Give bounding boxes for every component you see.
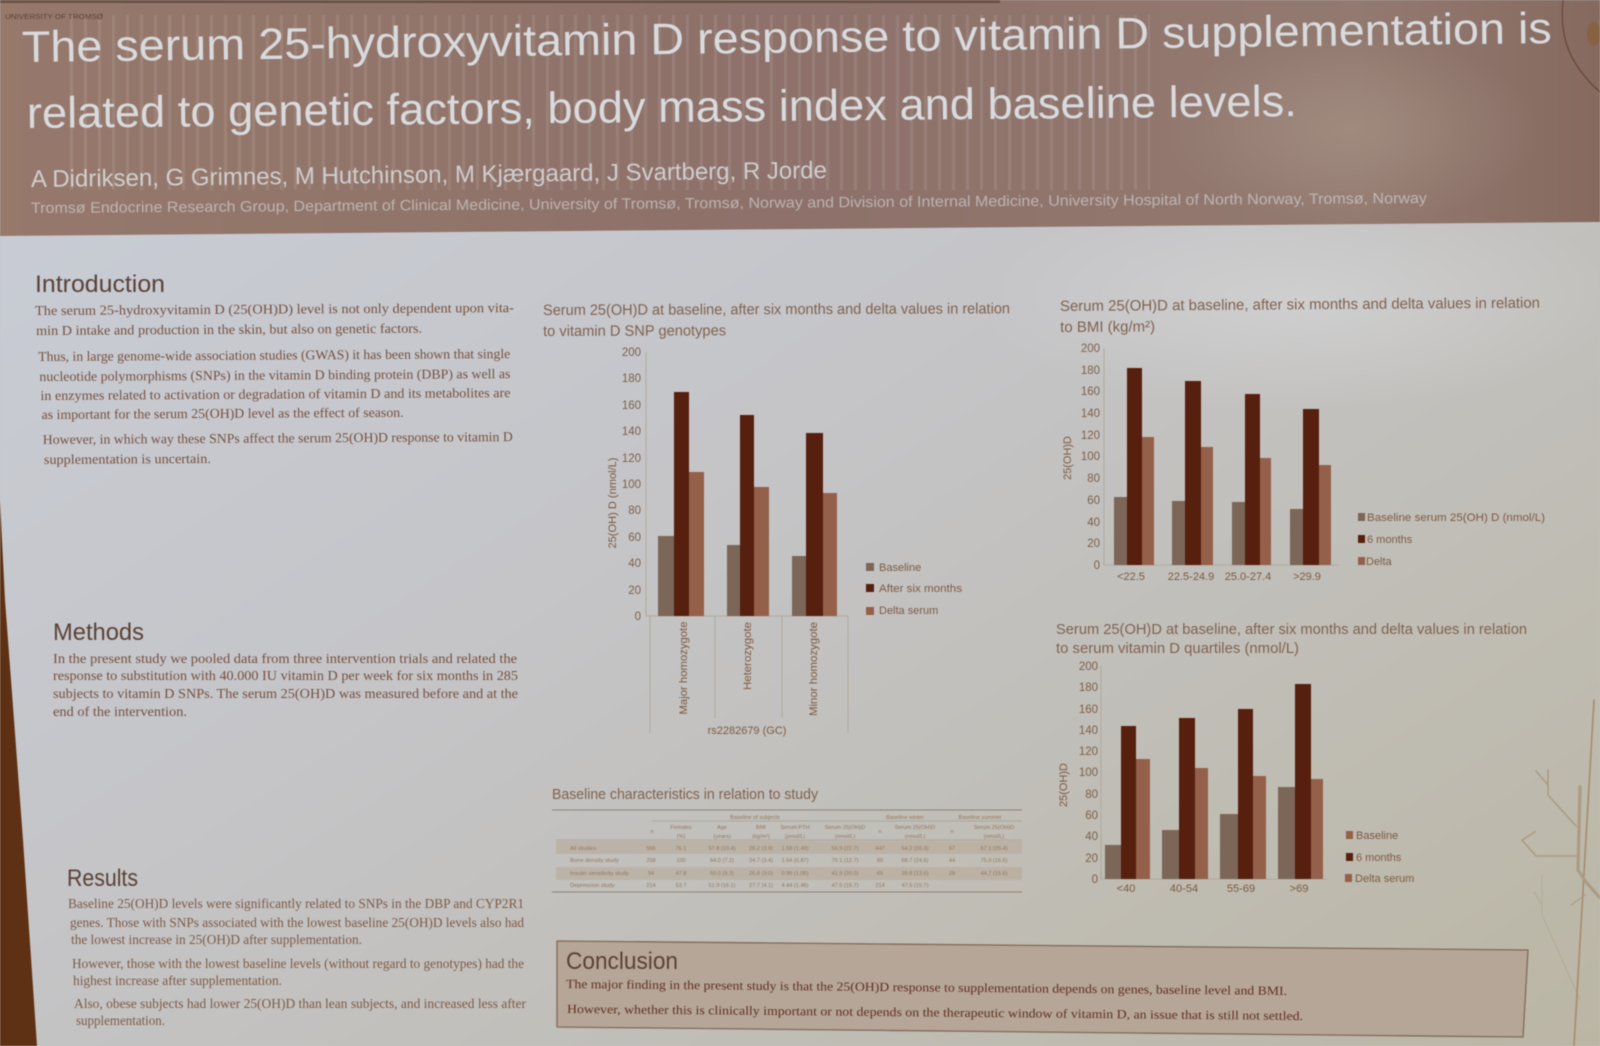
text block: introduction: However, in which way these SNPs affect the serum 25(OH)D response to vitamin D [43,429,513,447]
table header: (nmol/L) [835,834,855,840]
y axis labels: 40 [1087,517,1100,529]
chart title: genotypes: Serum 25(OH)D at baseline, after six months and delta values in relation [543,300,1010,319]
legend: 6 months [1367,534,1413,546]
heading: methods: Methods [53,619,144,646]
title: related to genetic factors, body mass index and baseline levels. [27,77,1297,138]
table rows: 39.8 (13.6) [901,871,929,877]
table rows: 214 [646,883,656,889]
category labels: >29.9 [1293,571,1321,583]
y axis labels: 0 [1094,560,1100,572]
table header: Females [670,825,692,831]
table rows: 68.7 (24.6) [901,858,929,864]
table header: n [878,829,882,835]
text block: introduction: Thus, in large genome-wide association studies (GWAS) it has been shown that single [38,346,510,364]
y axis labels: 180 [1079,682,1098,694]
table header [650,815,1014,840]
table rows: 1.58 (1.49) [781,846,809,852]
y axis labels [622,347,641,623]
table rows: 214 [875,883,885,889]
table rows: 53.7 [676,883,686,889]
y axis labels: 160 [1079,704,1098,716]
table header: (years) [713,834,731,840]
axes [1104,348,1339,565]
text block: results: Also, obese subjects had lower 25(OH)D than lean subjects, and increased less after [74,996,527,1011]
y axis labels: 140 [1081,408,1100,420]
table header: Age [717,825,727,831]
table header: (kg/m²) [752,834,770,840]
panel: BMI chart [1060,295,1545,583]
table rows: 44 [949,858,955,864]
table header: Baseline summer [958,815,1002,821]
panel: genotype chart [543,300,1010,737]
y axis labels: 200 [1079,661,1098,673]
conclusion box [557,941,1528,1037]
table rows: 0.96 (1.06) [781,871,809,877]
y axis labels: 80 [1087,473,1100,485]
table rows: 50.0 (9.3) [710,871,734,877]
text block: conclusion: However, whether this is clinically important or not depends on the therapeutic window of vitamin D, an issue that is still not settled. [567,1002,1303,1023]
y axis labels: 60 [1085,810,1098,822]
table header: (pmol/L) [785,834,805,840]
bars [1105,684,1323,879]
table header: (%) [677,834,685,840]
text block: methods: subjects to vitamin D SNPs. The serum 25(OH)D was measured before and at the [53,686,518,701]
table rows: 566 [646,846,656,852]
y axis labels: 180 [622,373,641,385]
y axis labels: 100 [622,479,641,491]
category labels: Heterozygote [742,622,754,690]
title: The serum 25-hydroxyvitamin D response to vitamin D supplementation is [22,4,1552,72]
text block: methods: end of the intervention. [53,704,187,719]
table rows: 100 [676,858,686,864]
text block: introduction: nucleotide polymorphisms (SNPs) in the vitamin D binding protein (DBP) as well as [39,366,510,384]
header band [0,0,1600,236]
text block: introduction [35,300,515,467]
twig shadow on right side [1522,700,1600,1046]
legend: Delta [1366,556,1393,568]
y axis labels: 200 [1081,343,1100,355]
table rows: 47.5 (15.7) [901,883,929,889]
table rows: 67.1 (25.4) [980,846,1008,852]
axes and separators [646,352,848,733]
table header: Serum 25(OH)D [825,825,865,831]
heading: conclusion: Conclusion [566,948,678,975]
y axis title: 25(OH) D (nmol/L) [607,457,619,549]
text block: methods: response to substitution with 40.000 IU vitamin D per week for six months in 285 [53,668,518,683]
table rows: Bone density study [570,858,619,864]
y axis labels: 0 [1092,874,1098,886]
y axis labels: 120 [622,453,641,465]
table rows: 1.64 (0.87) [781,858,809,864]
table rows: 447 [875,846,885,852]
authors: A Didriksen, G Grimnes, M Hutchinson, M Kjærgaard, J Svartberg, R Jorde [31,157,827,193]
affiliation: Tromsø Endocrine Research Group, Department of Clinical Medicine, University of Tromsø, Tromsø, Norway and Division of Internal Medicine, University Hospital of North Norway, Tromsø, Norway [31,190,1428,217]
table rows: 76.1 [676,846,686,852]
y axis labels: 60 [628,532,641,544]
chart title: genotypes [543,300,1010,340]
table rows: 28 [949,871,955,877]
legend [1345,830,1414,885]
table rows: 51.9 (16.1) [708,883,736,889]
y axis labels: 40 [1085,831,1098,843]
y axis title: 25(OH)D [1058,763,1070,807]
x axis label: rs2282679 (GC) [708,725,786,737]
table rows: 27.7 (4.1) [749,883,773,889]
text block: results: the lowest increase in 25(OH)D after supplementation. [71,932,362,947]
table rows: 64.0 (7.2) [710,858,734,864]
y axis labels: 20 [1085,853,1098,865]
axes [1101,666,1327,879]
y axis labels: 160 [622,400,641,412]
y axis labels: 40 [628,558,641,570]
heading: introduction: Introduction [35,271,165,298]
text block: results: Baseline 25(OH)D levels were significantly related to SNPs in the DBP and CYP2R1 [68,896,524,911]
table rows: 57 [949,846,955,852]
legend: Baseline [879,562,921,574]
y axis labels: 60 [1087,495,1100,507]
text block: methods: In the present study we pooled data from three intervention trials and related the [53,651,517,666]
category labels: <40 [1117,883,1135,895]
table rows: 94 [648,871,654,877]
legend: Baseline [1356,830,1398,842]
text block: introduction: The serum 25-hydroxyvitamin D (25(OH)D) level is not only dependent upon vita- [35,300,515,318]
table rows: 47.5 (15.7) [831,883,859,889]
table header: n [650,829,654,835]
table rows: Insulin sensitivity study [570,871,629,877]
table rows: 4.44 (1.46) [781,883,809,889]
table rows: 57.8 (10.4) [708,846,736,852]
table rows: 54.2 (20.3) [901,846,929,852]
table rows: 47.8 [676,871,686,877]
table header: Baseline winter [886,815,924,821]
legend [866,562,963,617]
chart title: BMI: Serum 25(OH)D at baseline, after six months and delta values in relation [1060,295,1540,315]
y axis labels [1079,661,1098,886]
category labels: 25.0-27.4 [1225,571,1271,583]
text block: conclusion: The major finding in the present study is that the 25(OH)D response to supplementation depends on genes, baseline level and BMI. [566,977,1287,998]
y axis labels: 120 [1081,430,1100,442]
legend: Delta serum [1355,873,1414,885]
category labels: Major homozygote [678,621,690,715]
y axis labels: 180 [1081,365,1100,377]
category labels [678,622,820,716]
table rows: 75.1 (12.7) [831,858,859,864]
category labels [1117,883,1308,895]
panel: methods [53,619,518,719]
y axis labels: 20 [1087,538,1100,550]
table heading: Baseline characteristics in relation to study [552,787,819,803]
table rows: All studies [570,846,597,852]
y axis labels: 140 [1079,725,1098,737]
table header: BMI [756,825,766,831]
table header: Serum 25(OH)D [895,825,935,831]
table header: n [950,829,954,835]
legend: Baseline serum 25(OH) D (nmol/L) [1367,512,1545,524]
text block: methods [53,651,518,719]
chart title: genotypes: to vitamin D SNP genotypes [543,322,726,340]
legend: 6 months [1356,852,1402,864]
brown edge strip at left [0,500,37,1046]
chart title: quartiles [1056,621,1527,657]
title [22,4,1552,138]
table rows: 56.9 (22.7) [831,846,859,852]
text block: introduction: supplementation is uncertain. [44,451,211,467]
category labels: 40-54 [1170,883,1198,895]
y axis labels: 20 [628,585,641,597]
y axis labels: 80 [1085,789,1098,801]
y axis labels: 200 [622,347,641,359]
category labels: 55-69 [1227,883,1255,895]
table rows [570,846,1008,889]
panel: quartile chart [1056,621,1527,895]
category labels: <22.5 [1117,571,1145,583]
text block: results: However, those with the lowest baseline levels (without regard to genotypes) had the [72,956,524,971]
y axis labels: 100 [1079,767,1098,779]
y axis labels: 100 [1081,451,1100,463]
y axis labels: 0 [635,611,641,623]
panel: results [67,865,527,1028]
table rows: Depression study [570,883,615,889]
table rows: 258 [646,858,656,864]
text block: introduction: in enzymes related to activation or degradation of vitamin D and its metabolites are [40,385,511,403]
chart title: BMI [1060,295,1540,336]
bars [658,392,837,616]
y axis labels: 120 [1079,746,1098,758]
bars [1114,368,1331,565]
y axis labels: 160 [1081,386,1100,398]
table header: (nmol/L) [905,834,925,840]
text block: introduction: min D intake and production in the skin, but also on genetic factors. [36,321,422,338]
y axis labels: 80 [628,505,641,517]
table header: (nmol/L) [984,834,1004,840]
y axis labels [1081,343,1100,572]
table rules and bands [552,810,1022,892]
category labels: 22.5-24.9 [1168,571,1214,583]
text block: results: genes. Those with SNPs associated with the lowest baseline 25(OH)D levels also had [70,915,524,930]
panel: introduction [35,271,515,467]
panel: baseline table [552,787,1022,892]
text block: results [68,896,527,1028]
text block: conclusion [566,977,1303,1023]
category labels [1117,571,1321,583]
legend: Delta serum [879,605,938,617]
text block: results: highest increase after supplementation. [73,973,282,988]
chart title: quartiles: to serum vitamin D quartiles (nmol/L) [1056,640,1299,657]
table header: Baseline of subjects [730,815,780,821]
table rows: 44.7 (15.6) [980,871,1008,877]
panel: conclusion [557,941,1528,1037]
text block: results: supplementation. [76,1013,165,1028]
y axis title: 25(OH)D [1062,436,1074,480]
table rows: 28.2 (3.9) [749,846,773,852]
table rows: 41.9 (20.0) [831,871,859,877]
legend [1358,512,1545,568]
legend: After six months [879,583,963,595]
table rows: 65 [877,871,883,877]
table rows: 26.8 (3.0) [749,871,773,877]
chart title: BMI: to BMI (kg/m²) [1060,318,1155,336]
table header: Serum PTH [780,825,810,831]
institution mark: UNIVERSITY OF TROMSØ [5,14,104,21]
table rows: 34.7 (3.4) [749,858,773,864]
y axis labels: 140 [622,426,641,438]
table rows: 75.9 (16.6) [980,858,1008,864]
table header: Serum 25(OH)D [974,825,1014,831]
table rows: 80 [877,858,883,864]
category labels: Minor homozygote [808,622,820,716]
category labels: >69 [1290,883,1308,895]
chart title: quartiles: Serum 25(OH)D at baseline, after six months and delta values in relation [1056,621,1527,638]
text block: introduction: as important for the serum 25(OH)D level as the effect of season. [42,405,404,422]
heading: results: Results [67,865,138,892]
